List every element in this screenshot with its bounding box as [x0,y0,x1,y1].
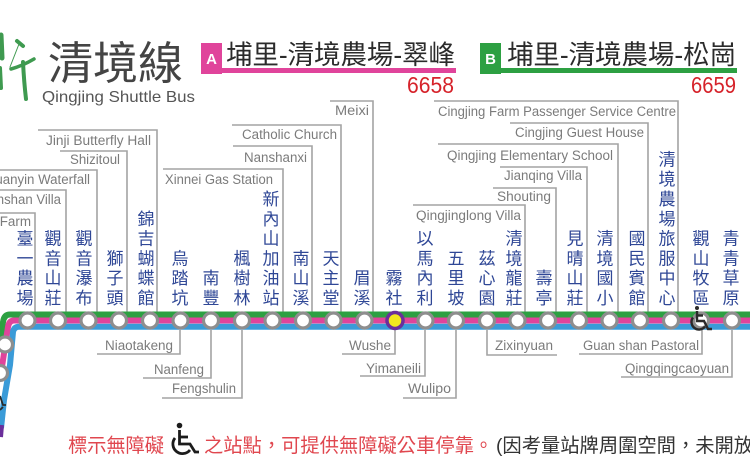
lower English leader labels: Wushe [349,338,391,353]
Chinese station names: 堂 [322,289,340,308]
Chinese station names: 南 [292,249,310,268]
upper English leader labels: Jinji Butterfly Hall [46,133,151,148]
lower English leader labels: Zixinyuan [495,338,553,353]
lower English leader labels: Qingqingcaoyuan [625,361,729,376]
Chinese station names: 國 [628,230,646,249]
Chinese station names: 坑 [172,289,188,308]
Chinese station names: 龍 [506,269,522,288]
Chinese station names: 坡 [448,289,464,308]
Chinese station names: 莊 [44,289,62,308]
lower English leader labels: Niaotakeng [105,338,173,353]
Chinese station names: 農 [16,269,34,288]
route number 6659: 6659 [691,72,736,98]
Chinese station names: 晴 [566,249,584,268]
Chinese station names: 樹 [234,269,250,288]
Chinese station names: 草 [722,269,740,288]
Chinese station names: 境 [658,170,676,189]
Chinese station names: 園 [478,289,496,308]
Chinese station names: 獅 [106,249,124,268]
Chinese station names: 踏 [172,269,188,288]
lower English leader labels [97,330,732,398]
Chinese station names: 內 [262,210,280,229]
Chinese station names: 中 [658,269,676,288]
Chinese station names: 山 [44,269,62,288]
Chinese station names: 清 [506,230,522,249]
lower English leader labels: Guan shan Pastoral [583,338,699,353]
Chinese station names: 觀 [44,230,62,249]
upper English leader labels: Qingjinglong Villa [416,208,522,223]
Chinese station names: 場 [16,289,34,308]
Chinese station names: 蝶 [138,269,154,288]
Chinese station names: 楓 [234,249,250,268]
Chinese station names: 烏 [172,249,188,268]
upper English leader labels: Shizitoul [70,152,120,167]
Chinese station names: 五 [448,249,464,268]
icon: wheelchair on station [691,306,712,330]
Chinese station names: 館 [138,289,154,308]
Chinese station names: 境 [596,249,614,268]
subtitle: Qingjing Shuttle Bus [42,89,195,106]
upper English leader labels: Meixi [335,103,369,118]
Chinese station names: 站 [262,289,280,308]
Chinese station names: 臺 [16,230,34,249]
Chinese station names: 音 [44,249,62,268]
Chinese station names [16,150,740,308]
Chinese station names: 天 [322,249,340,268]
Chinese station names: 茲 [478,249,496,268]
Chinese station names: 以 [416,230,434,249]
icon: partial wheelchair at left edge [0,396,6,410]
upper English leader labels: Jianqing Villa [504,168,583,183]
upper English leader labels: Catholic Church [242,127,337,142]
Chinese station names: 心 [658,289,676,308]
Chinese station names: 頭 [106,289,124,308]
upper English leader labels: Nanshanxi [244,150,307,165]
Chinese station names: 牧 [692,269,710,288]
Chinese station names: 音 [76,249,92,268]
Chinese station names: 馬 [416,249,434,268]
Chinese station names: 主 [322,269,340,288]
Chinese station names: 溪 [354,289,370,308]
upper English leader labels: Qingjing Elementary School [447,148,613,163]
Chinese station names: 油 [262,269,280,288]
upper English leader labels: Xinnei Gas Station [165,172,273,187]
Chinese station names: 林 [234,289,250,308]
Chinese station names: 清 [596,230,614,249]
Chinese station names: 溪 [292,289,310,308]
Chinese station names: 南 [202,269,220,288]
upper English leader labels [0,101,678,312]
Chinese station names: 青 [722,230,740,249]
Chinese station names: 觀 [692,230,710,249]
Chinese station names: 山 [692,249,710,268]
Chinese station names: 旅 [658,230,676,249]
Chinese station names: 里 [448,269,464,288]
Chinese station names: 莊 [566,289,584,308]
Chinese station names: 心 [478,269,496,288]
route number 6658: 6658 [407,72,454,98]
Chinese station names: 境 [506,249,522,268]
Chinese station names: 布 [76,289,92,308]
Chinese station names: 內 [416,269,434,288]
route heading B: 埔里-清境農場-松崗 [507,40,736,70]
Chinese station names: 賓 [628,269,646,288]
title: 清境線: 清境線 [48,38,183,89]
note: red accessibility text part 1: 標示無障礙 [68,435,164,457]
Chinese station names: 青 [722,249,740,268]
Chinese station names: 亭 [536,289,552,308]
Chinese station names: 農 [658,190,676,209]
Chinese station names: 利 [416,289,434,308]
Chinese station names: 場 [658,210,676,229]
route heading B: B [485,51,496,68]
Chinese station names: 區 [692,289,710,308]
lower English leader labels: Wulipo [408,381,451,396]
route heading A: A [206,51,217,68]
Chinese station names: 吉 [138,230,154,249]
lower English leader labels: Nanfeng [154,362,204,377]
Chinese station names: 民 [628,249,646,268]
Chinese station names: 莊 [506,289,522,308]
Chinese station names: 見 [566,230,584,249]
station markers [0,312,740,380]
Chinese station names: 蝴 [138,249,154,268]
route lines: green, pink, blue [0,314,750,437]
Chinese station names: 觀 [76,230,92,249]
Chinese station names: 子 [106,269,124,288]
logo brush mark [0,35,34,99]
Chinese station names: 小 [596,289,614,308]
note: red accessibility text part 2: 之站點，可提供無障礙公車停靠。 [204,435,493,457]
Chinese station names: 清 [658,150,676,169]
route heading A: 埔里-清境農場-翠峰 [226,40,455,70]
Chinese station names: 社 [386,289,402,308]
Chinese station names: 一 [16,249,34,268]
lower English leader labels: Fengshulin [172,381,236,396]
upper English leader labels: Cingjing Farm Passenger Service Centre [438,104,676,119]
Chinese station names: 壽 [536,269,552,288]
Chinese station names: 國 [596,269,614,288]
Chinese station names: 服 [658,249,676,268]
Chinese station names: 原 [722,289,740,308]
Chinese station names: 山 [262,230,280,249]
Chinese station names: 山 [566,269,584,288]
Chinese station names: 霧 [386,269,402,288]
Chinese station names: 山 [292,269,310,288]
Chinese station names: 錦 [138,210,154,229]
icon: wheelchair legend [173,423,199,454]
Chinese station names: 豐 [202,289,220,308]
note: parenthetical text cut off: (因考量站牌周圍空間，未開放 [496,435,750,457]
upper English leader labels: Shouting [497,189,551,204]
Chinese station names: 加 [262,249,280,268]
upper English leader labels: Cingjing Guest House [515,125,644,140]
lower English leader labels: Yimaneili [366,361,421,376]
Chinese station names: 瀑 [76,269,92,288]
Chinese station names: 眉 [354,269,370,288]
Chinese station names: 新 [262,190,280,209]
Chinese station names: 館 [628,289,646,308]
